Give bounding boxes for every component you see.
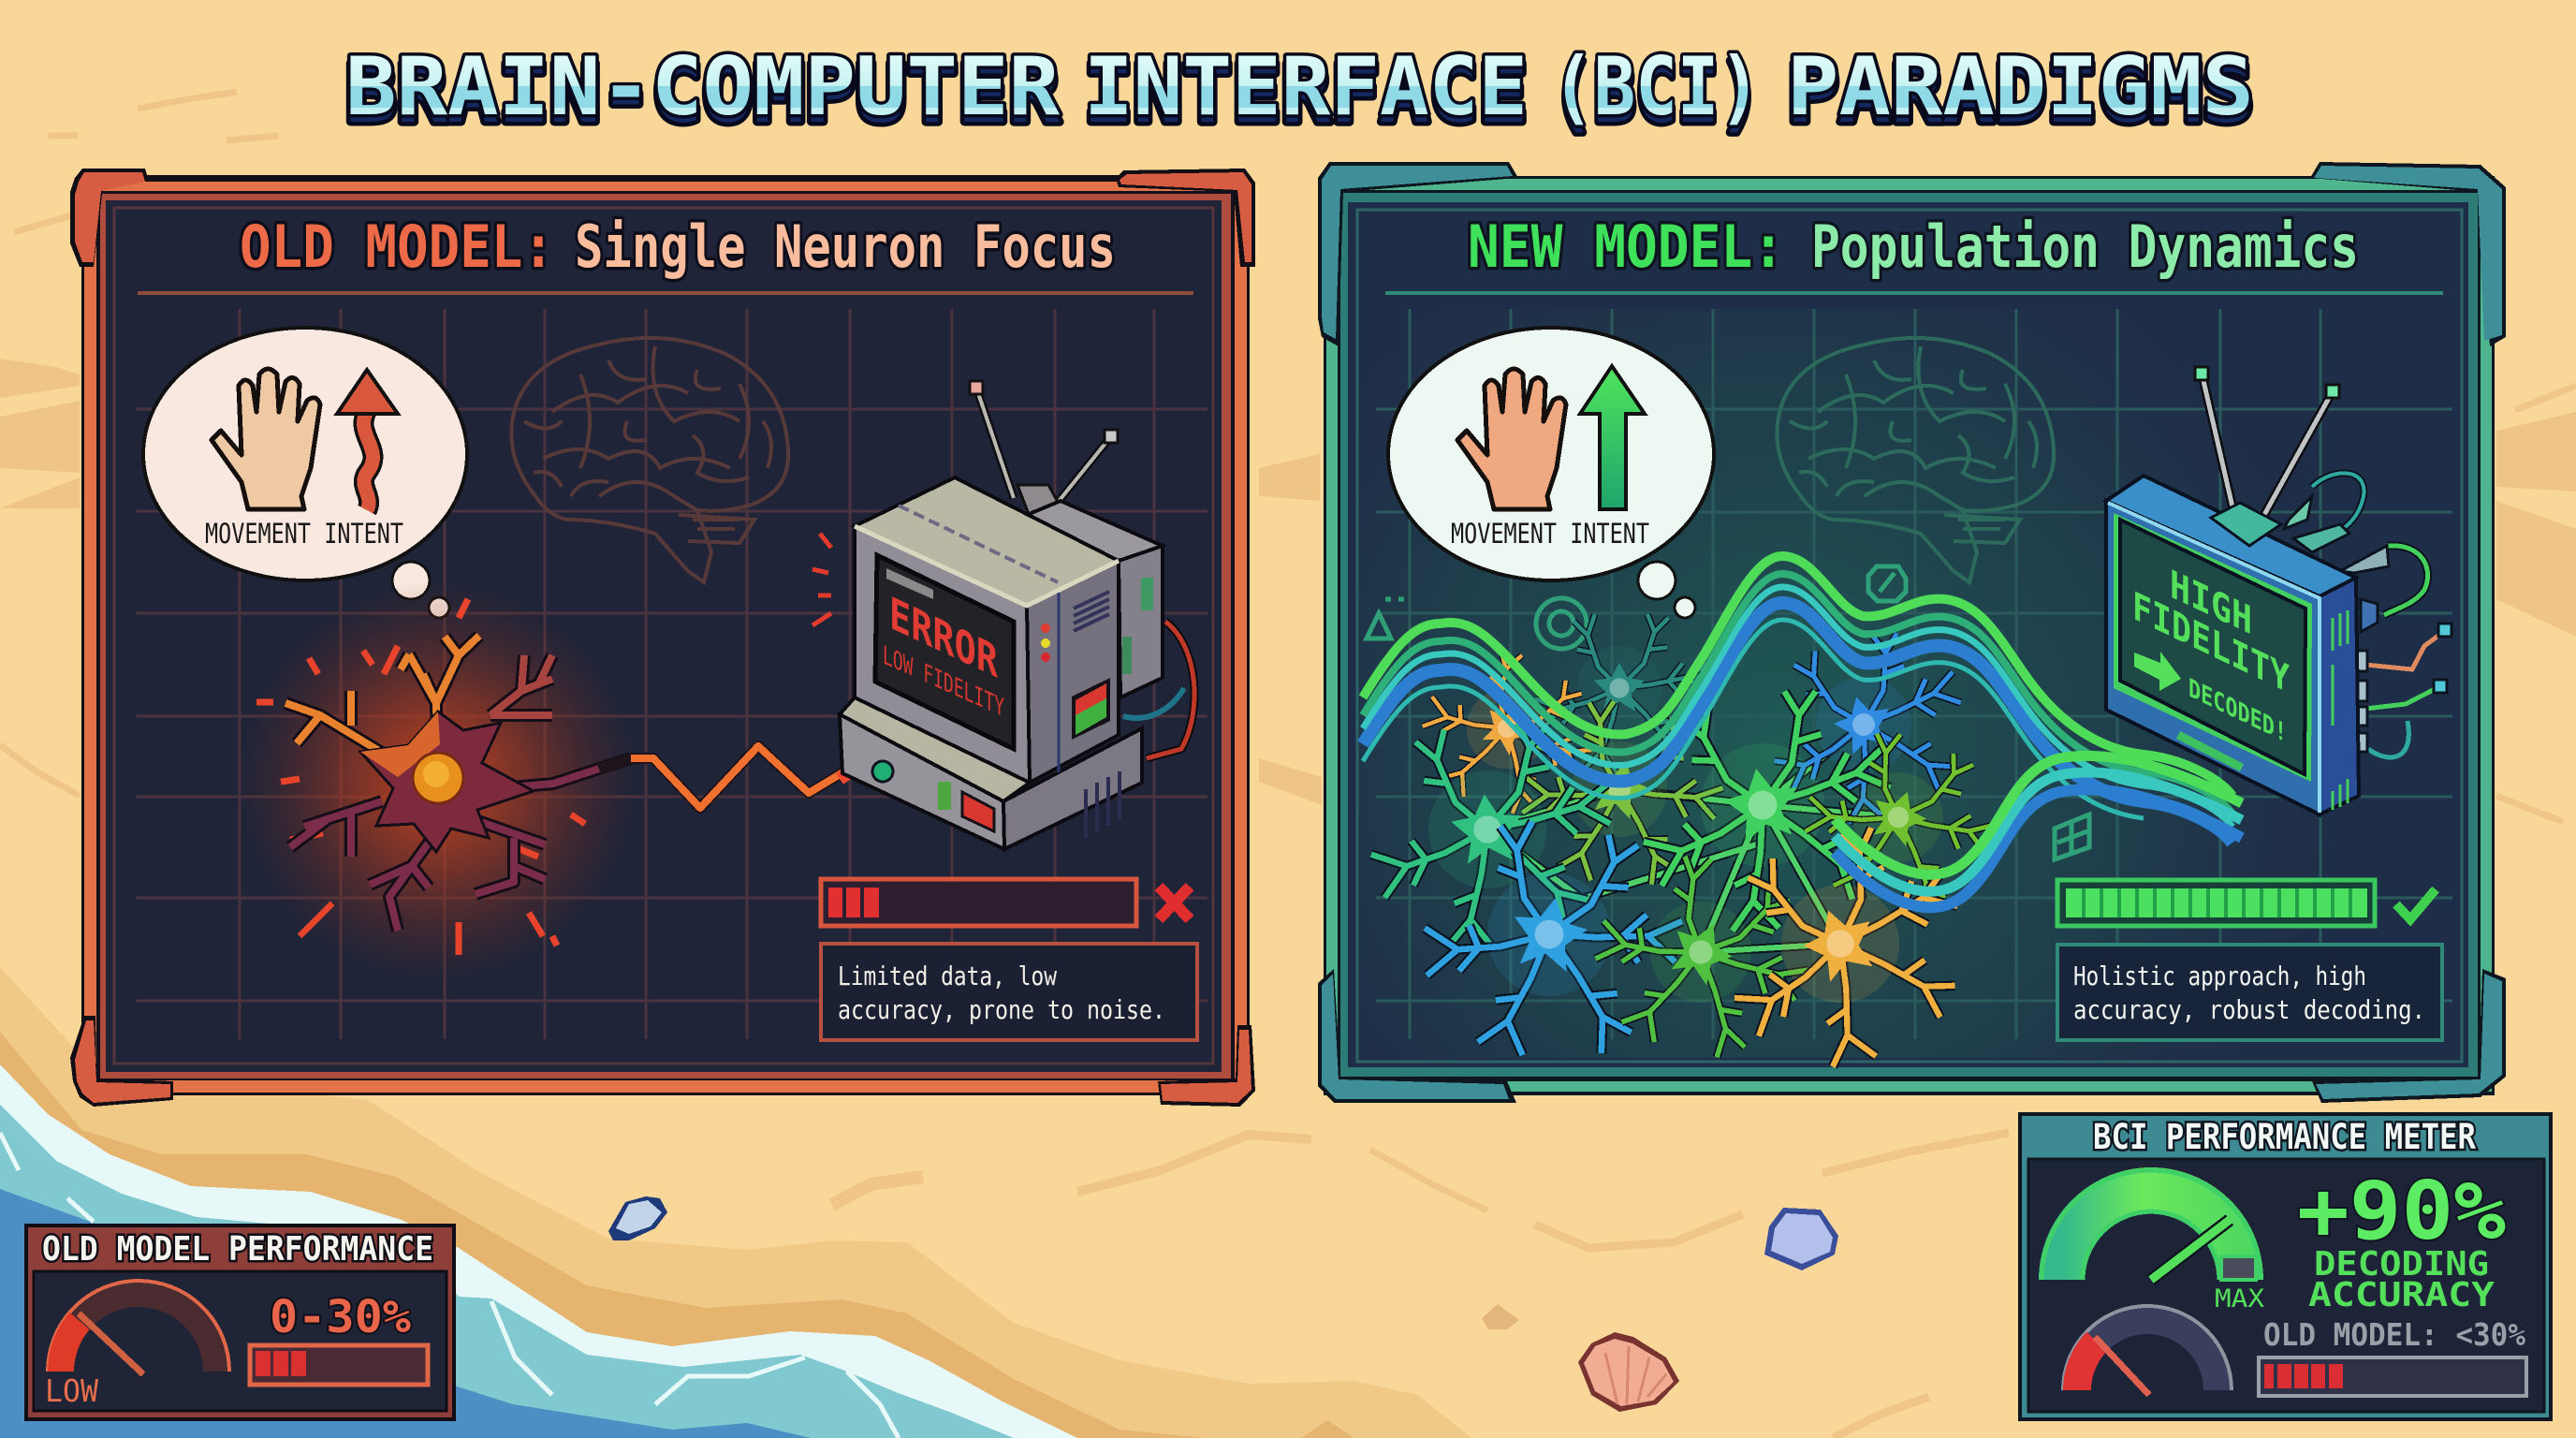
glow: new — [1359, 309, 2459, 1058]
neuron: blue — [1749, 618, 1984, 842]
heading: old: OLD MODEL: — [240, 213, 554, 281]
floating icons: new — [1367, 566, 2089, 859]
progress bar: new — [2057, 880, 2375, 926]
neuron: teal dark — [1535, 614, 1707, 772]
neuron: lime — [1783, 712, 2013, 933]
tv side details — [872, 578, 1153, 838]
progress bar: old — [821, 879, 1136, 926]
frame: old — [70, 169, 1255, 1107]
neuron: blue lower — [1406, 806, 1694, 1078]
heading: new: Population Dynamics — [1811, 213, 2359, 281]
sand patches left — [0, 359, 2576, 805]
icon: check mark — [2396, 889, 2436, 919]
meter: old model performance — [24, 1224, 456, 1421]
neuron: orange — [1397, 626, 1616, 841]
panel: new model — [1318, 162, 2506, 1103]
brain outline: old — [511, 338, 788, 582]
text box: old — [821, 944, 1197, 1040]
deep water — [0, 1189, 811, 1438]
heading: old — [240, 213, 1116, 281]
label: old model below 30: OLD MODEL: <30% — [2263, 1316, 2525, 1353]
title face — [345, 40, 2254, 134]
shell: pink — [1578, 1332, 1679, 1412]
title shadow: BRAIN-COMPUTER — [345, 48, 1060, 141]
icon: x mark — [1159, 887, 1190, 919]
title face: (BCI) — [1552, 40, 1761, 134]
label: low: LOW — [45, 1372, 98, 1409]
neuron: center green — [1622, 676, 1910, 948]
tv body: new — [2106, 476, 2356, 596]
neuron: green lower — [1566, 829, 1834, 1088]
meter heading: bci: BCI PERFORMANCE METER — [2093, 1117, 2477, 1157]
antennas: new — [2195, 367, 2339, 521]
neuron: teal green — [1361, 716, 1620, 958]
high text: HIGH — [2170, 562, 2252, 644]
title shadow — [345, 48, 2254, 141]
label: max: MAX — [2215, 1284, 2264, 1313]
low fidelity text: LOW FIDELITY — [883, 639, 1004, 724]
frame: new — [1318, 162, 2506, 1103]
cables: new — [2312, 473, 2446, 757]
shell: blue left — [608, 1196, 667, 1240]
title shadow: PARADIGMS — [1787, 48, 2254, 141]
wet sand inner band — [0, 1032, 1205, 1438]
icon: wavy arrow — [337, 370, 398, 510]
tv body — [1016, 501, 1163, 570]
shallow water — [0, 1105, 1014, 1438]
wet sand outer band — [0, 967, 1471, 1438]
plugs: new — [2284, 496, 2452, 752]
title shadow: INTERFACE — [1084, 48, 1528, 141]
neuron: old — [237, 580, 639, 983]
meter heading: old: OLD MODEL PERFORMANCE — [42, 1230, 433, 1269]
fidelity text: FIDELITY — [2132, 583, 2290, 703]
foam lines — [0, 1133, 899, 1438]
panel: old model — [70, 169, 1255, 1107]
grid: old — [136, 309, 1208, 1039]
gauge: old small — [2063, 1306, 2232, 1395]
title shadow: (BCI) — [1552, 48, 1761, 141]
tv: new — [2106, 367, 2452, 814]
meter: bci performance — [2018, 1112, 2553, 1421]
text box: old: Limited data, low — [838, 961, 1057, 991]
label: decoding accuracy — [2308, 1245, 2495, 1314]
title — [345, 40, 2254, 141]
tv base — [840, 697, 1030, 801]
gauge: low — [48, 1281, 229, 1374]
divider: new — [1385, 291, 2443, 295]
value: +90%: +90% — [2297, 1165, 2506, 1258]
brain outline: new — [1777, 338, 2054, 582]
tv: old — [812, 381, 1194, 849]
bar: old performance — [250, 1345, 428, 1385]
bar: old in meter — [2259, 1357, 2526, 1396]
signal wave: old — [599, 746, 866, 808]
title face: BRAIN-COMPUTER — [345, 40, 1060, 134]
icon: hand old — [212, 369, 320, 509]
heading: new — [1468, 213, 2359, 281]
thought bubble: new — [1388, 328, 1714, 618]
text box: new: Holistic approach, high — [2073, 961, 2366, 991]
label: movement intent old: MOVEMENT INTENT — [205, 518, 403, 550]
value: 0-30%: 0-30% — [270, 1291, 411, 1343]
error text: ERROR — [889, 586, 998, 689]
foam — [0, 1064, 1077, 1438]
shell: blue right — [1764, 1208, 1838, 1270]
icon: tv arrow — [2134, 652, 2181, 691]
grid: new — [1376, 309, 2452, 1039]
icon: straight arrow — [1580, 366, 1645, 509]
antennas: old — [970, 381, 1118, 514]
text box: new: accuracy, robust decoding. — [2073, 994, 2425, 1025]
title face: PARADIGMS — [1787, 40, 2254, 134]
neuron network — [1361, 614, 2013, 1094]
population wave ribbons — [1363, 556, 2242, 907]
slot — [2178, 735, 2242, 768]
decoded text: DECODED! — [2188, 672, 2287, 749]
text box: old: accuracy, prone to noise. — [838, 994, 1165, 1025]
tv screen — [875, 555, 1014, 749]
neuron: green yellow — [1502, 683, 1737, 907]
tv screen: new — [2114, 513, 2312, 782]
heading: new: NEW MODEL: — [1468, 213, 1784, 281]
gauge: max — [2042, 1170, 2261, 1280]
heading: old: Single Neuron Focus — [575, 213, 1116, 281]
label: movement intent new: MOVEMENT INTENT — [1451, 518, 1649, 550]
error sparks — [812, 534, 831, 625]
neuron: orange lower — [1694, 805, 1996, 1094]
text box: new — [2057, 945, 2442, 1040]
thought bubble: old — [143, 328, 467, 618]
antenna base — [2211, 503, 2281, 546]
icon: hand new — [1457, 369, 1566, 509]
connections — [1487, 725, 1898, 952]
side bars — [2333, 610, 2348, 810]
sparks — [256, 599, 585, 955]
label: decoding accuracy: DECODING — [2314, 1245, 2489, 1284]
shell: small sand — [1482, 1304, 1519, 1329]
title face: INTERFACE — [1084, 40, 1528, 134]
divider: old — [138, 291, 1193, 295]
label: decoding accuracy: ACCURACY — [2308, 1276, 2495, 1314]
cables: old — [1123, 622, 1194, 758]
